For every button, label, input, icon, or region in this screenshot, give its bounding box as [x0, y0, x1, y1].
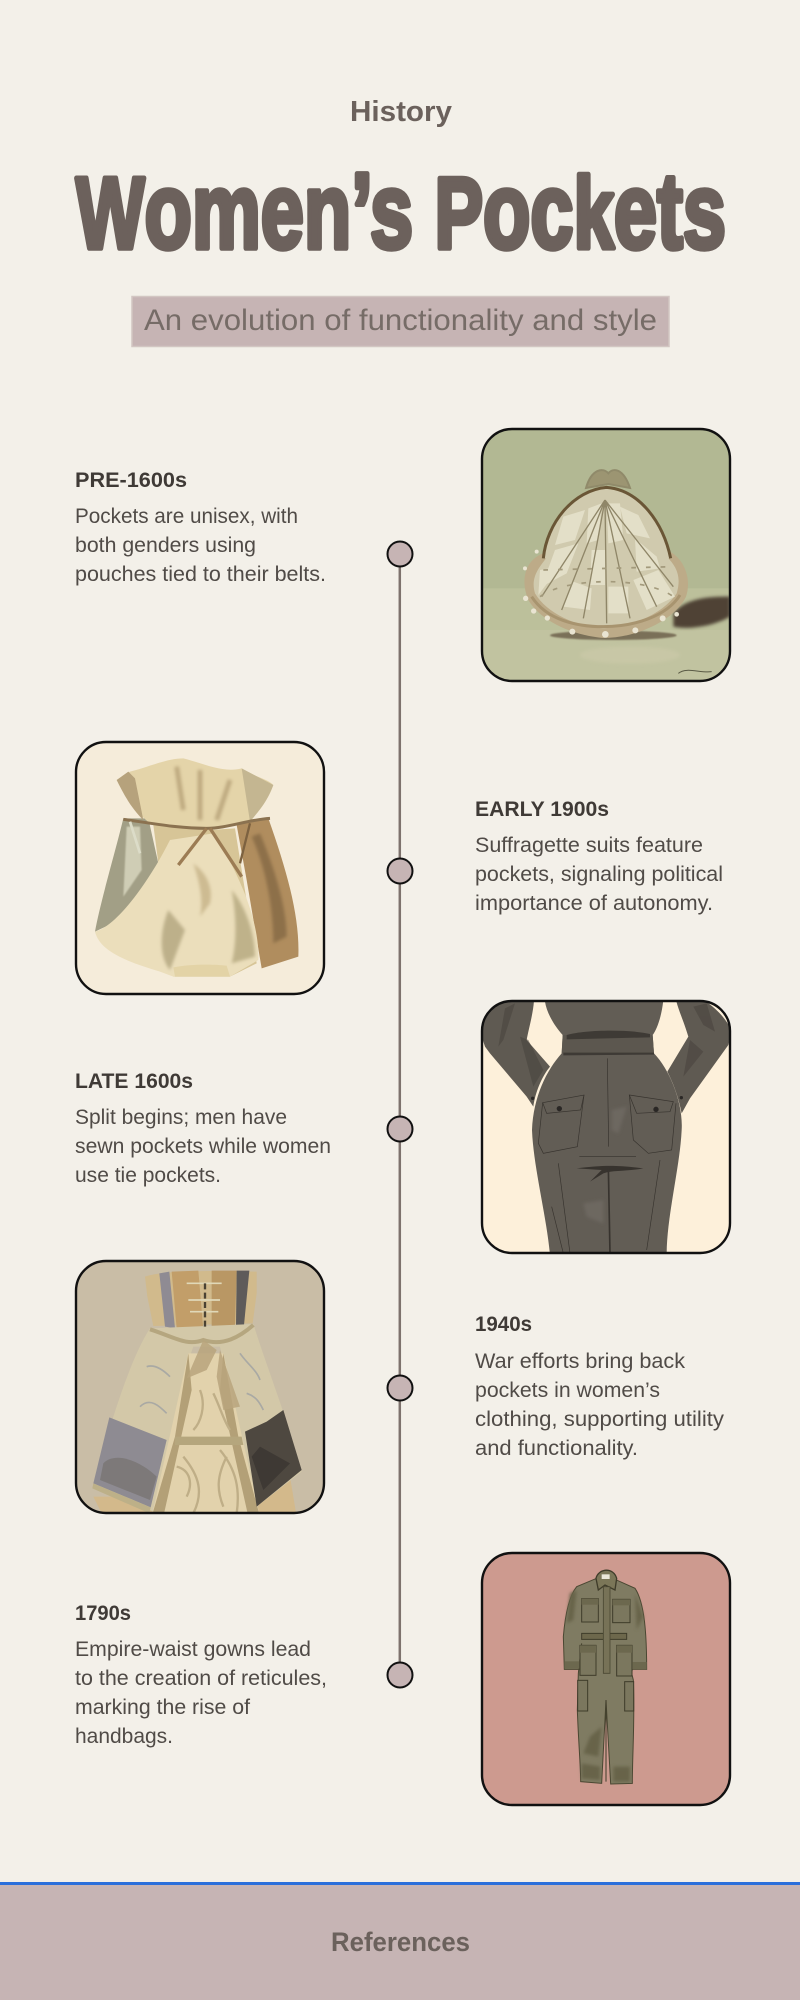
text block: EARLY 1900s	[475, 798, 723, 915]
text block: 1790s: marking the rise of	[75, 1695, 250, 1719]
text block: PRE-1600s: pouches tied to their belts.	[75, 562, 326, 586]
image panel: embroidered pocket skirt	[76, 1261, 324, 1517]
timeline dot 1	[388, 542, 412, 566]
text block: EARLY 1900s: pockets, signaling political	[475, 862, 723, 886]
text block: 1940s: 1940s	[475, 1313, 532, 1336]
text block: LATE 1600s: LATE 1600s	[75, 1070, 193, 1093]
text block: EARLY 1900s: EARLY 1900s	[475, 798, 609, 821]
footer heading: References: References	[331, 1927, 470, 1957]
text block: EARLY 1900s: importance of autonomy.	[475, 891, 713, 915]
eyebrow heading: History: History	[350, 96, 452, 128]
text block: LATE 1600s: Split begins; men have	[75, 1105, 287, 1129]
timeline dot 4	[388, 1376, 412, 1400]
image panel: jumpsuit back view	[478, 1000, 732, 1255]
text block: 1940s: clothing, supporting utility	[475, 1407, 724, 1431]
text block: 1790s: to the creation of reticules,	[75, 1666, 327, 1690]
subtitle banner: An evolution of functionality and style	[144, 304, 657, 337]
text block: 1790s	[75, 1602, 327, 1748]
text block: LATE 1600s	[75, 1070, 331, 1187]
image panel: olive utility jumpsuit	[482, 1553, 730, 1805]
text block: 1790s: handbags.	[75, 1724, 173, 1748]
text block: 1940s: and functionality.	[475, 1436, 638, 1460]
text block: 1790s: Empire-waist gowns lead	[75, 1637, 311, 1661]
text block: 1940s	[475, 1313, 724, 1460]
timeline spine	[399, 554, 401, 1675]
text block: 1790s: 1790s	[75, 1602, 131, 1625]
text block: 1940s: War efforts bring back	[475, 1349, 685, 1373]
timeline dot 2	[388, 858, 412, 884]
text block: PRE-1600s	[75, 469, 326, 586]
text block: EARLY 1900s: Suffragette suits feature	[475, 833, 703, 857]
image panel: tie pocket	[76, 742, 324, 994]
text block: PRE-1600s: PRE-1600s	[75, 469, 187, 492]
text block: PRE-1600s: Pockets are unisex, with	[75, 504, 298, 528]
timeline dot 5	[388, 1662, 412, 1688]
text block: 1940s: pockets in women’s	[475, 1378, 660, 1402]
footer band	[0, 1882, 800, 2000]
text block: LATE 1600s: use tie pockets.	[75, 1163, 221, 1187]
image panel: beaded purse	[480, 429, 733, 687]
timeline dot 3	[388, 1116, 412, 1142]
text block: LATE 1600s: sewn pockets while women	[75, 1134, 331, 1158]
text block: PRE-1600s: both genders using	[75, 533, 256, 557]
title: Women’s Pockets	[76, 150, 726, 271]
subtitle banner	[132, 296, 669, 346]
